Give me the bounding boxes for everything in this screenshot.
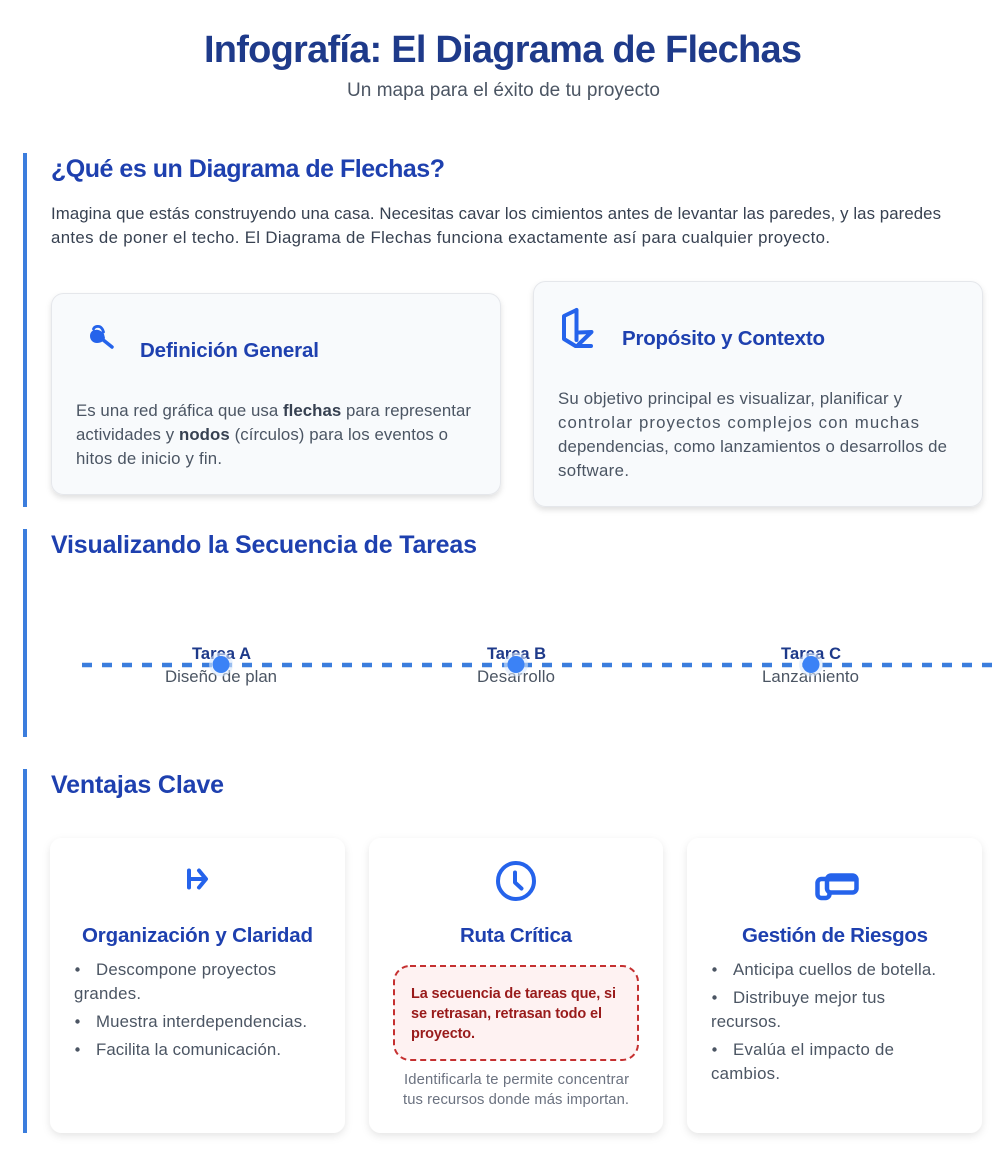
card: gestión de riesgos — [687, 838, 982, 1133]
card heading: Ruta Crítica — [460, 924, 573, 947]
task C — [762, 645, 859, 686]
intro text — [51, 204, 941, 247]
heading: secuencia: Visualizando la Secuencia de Tareas — [51, 531, 477, 559]
bullet list: cambios. — [711, 1064, 780, 1083]
bullet list: Muestra interdependencias. — [96, 1012, 307, 1031]
card: definición general — [52, 294, 500, 494]
heading: ventajas: Ventajas Clave — [51, 771, 224, 799]
task B — [477, 645, 555, 686]
card heading: Organización y Claridad — [82, 924, 313, 947]
bullet list: Anticipa cuellos de botella. — [733, 960, 936, 979]
callout: se retrasan, retrasan todo el — [411, 1006, 602, 1022]
callout: proyecto. — [411, 1026, 475, 1042]
task A: Diseño de plan — [165, 667, 277, 686]
title: Infografía: El Diagrama de Flechas — [204, 29, 802, 71]
task A: Tarea A — [192, 645, 251, 663]
note — [403, 1072, 629, 1108]
panel: secuencia de tareas — [23, 529, 998, 737]
task A — [165, 645, 277, 686]
task B: Tarea B — [487, 645, 546, 663]
intro text: antes de poner el techo. El Diagrama de Flechas funciona exactamente así para cualquier proyecto. — [51, 228, 830, 247]
callout: La secuencia de tareas que, si — [411, 986, 616, 1002]
card text: hitos de inicio y fin. — [76, 449, 222, 468]
card heading: Gestión de Riesgos — [742, 924, 928, 947]
card text: controlar proyectos complejos con muchas — [558, 413, 919, 432]
bullet list: recursos. — [711, 1012, 781, 1031]
card text: Su objetivo principal es visualizar, planificar y — [558, 389, 903, 408]
card text: actividades y nodos (círculos) para los eventos o — [76, 425, 448, 444]
arrow: dashed timeline — [82, 663, 998, 667]
note: Identificarla te permite concentrar — [404, 1072, 629, 1088]
bullet list — [711, 960, 936, 1083]
card text — [558, 389, 947, 480]
bullet list: grandes. — [74, 984, 141, 1003]
subtitle: Un mapa para el éxito de tu proyecto — [347, 80, 660, 101]
bullet list: Facilita la comunicación. — [96, 1040, 281, 1059]
card heading: Propósito y Contexto — [622, 327, 825, 350]
card: ruta crítica — [369, 838, 663, 1133]
panel: ventajas clave — [23, 769, 982, 1133]
card heading: Definición General — [140, 339, 319, 362]
bullet list: Descompone proyectos — [96, 960, 276, 979]
bullet list: Evalúa el impacto de — [733, 1040, 894, 1059]
note: tus recursos donde más importan. — [403, 1092, 629, 1108]
panel: qué es — [23, 153, 982, 507]
heading: qué es: ¿Qué es un Diagrama de Flechas? — [51, 155, 445, 183]
icon: clock — [498, 863, 534, 899]
card text: Es una red gráfica que usa flechas para representar — [76, 401, 471, 420]
task C: Lanzamiento — [762, 667, 859, 686]
card: propósito y contexto — [534, 282, 982, 506]
callout — [394, 966, 638, 1060]
icon: cards — [818, 876, 856, 898]
task B: Desarrollo — [477, 667, 555, 686]
card text — [76, 401, 471, 468]
card text: software. — [558, 461, 629, 480]
bullet list — [74, 960, 307, 1059]
icon: open book — [564, 310, 592, 346]
bullet list: Distribuye mejor tus — [733, 988, 885, 1007]
task C: Tarea C — [781, 645, 841, 663]
icon: arrow — [189, 870, 206, 888]
card text: dependencias, como lanzamientos o desarrollos de — [558, 437, 947, 456]
intro text: Imagina que estás construyendo una casa. Necesitas cavar los cimientos antes de levantar las paredes, y las paredes — [51, 204, 941, 223]
icon: key — [90, 326, 112, 347]
card: organización — [50, 838, 345, 1133]
